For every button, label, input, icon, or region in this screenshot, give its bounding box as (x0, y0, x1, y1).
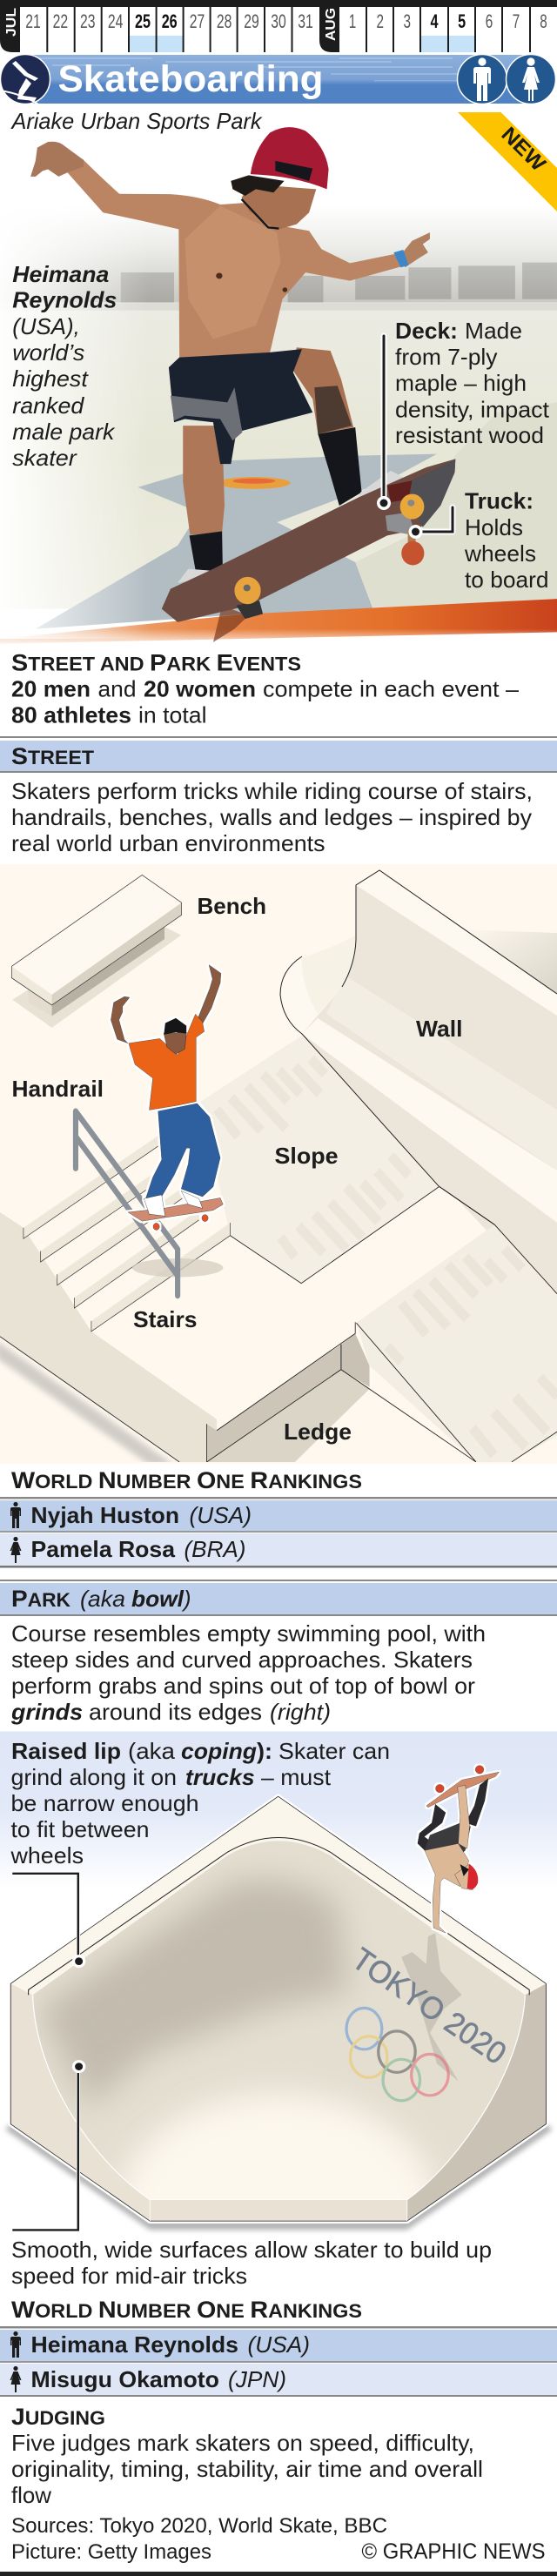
date strip: 3 (404, 10, 411, 32)
label: slope: Slope (275, 1143, 338, 1169)
text block: park description: steep sides and curved approaches. Skaters (11, 1647, 473, 1673)
wall (280, 870, 557, 1305)
date strip: 23 (80, 10, 96, 32)
venue caption: Ariake Urban Sports Park (10, 108, 263, 134)
text block: street and park events: 20 women (144, 676, 256, 702)
platform sides and ledge (0, 1186, 557, 1465)
text: raised lip: be narrow enough (10, 1790, 198, 1816)
bowl (3, 1794, 554, 2233)
text block: street and park events (11, 650, 520, 728)
text block: judging: originality, timing, stability, air time and overall (11, 2456, 483, 2482)
heading bar: park: PARK (11, 1586, 70, 1612)
text block: park description: (right) (270, 1699, 331, 1725)
bench (11, 875, 182, 1028)
text: raised lip: to fit between (10, 1816, 149, 1842)
caption: Heimana Reynolds (12, 261, 117, 471)
text: raised lip (10, 1738, 390, 1868)
date strip: 8 (540, 10, 547, 32)
text block: street and park events: in total (138, 702, 207, 728)
text block: street and park events: 80 athletes (11, 702, 131, 728)
date strip: 22 (53, 10, 68, 32)
text block: judging: JUDGING (11, 2404, 105, 2430)
callout: deck: density, impact (395, 397, 550, 423)
text block: judging: flow (11, 2482, 51, 2508)
caption: Heimana Reynolds: highest (12, 366, 90, 392)
callout: truck: wheels (464, 540, 536, 567)
text block: park description: Course resembles empty swimming pool, with (11, 1620, 486, 1647)
text: raised lip: Skater can (278, 1738, 390, 1764)
title text: Skateboarding (57, 58, 324, 100)
skater figure (30, 127, 455, 642)
text block: smooth surfaces: speed for mid-air tricks (11, 2263, 247, 2289)
sources and credit (11, 2514, 545, 2564)
ribbon: new event (458, 112, 557, 211)
date strip: 30 (271, 10, 286, 32)
text block: park description: around its edges (89, 1699, 262, 1725)
date strip: 1 (349, 10, 356, 32)
callout: truck: to board (465, 567, 548, 593)
date strip: 26 (162, 10, 178, 32)
heading bar: park: (aka (80, 1586, 125, 1612)
date strip: 21 (25, 10, 41, 32)
icon: man (10, 1502, 21, 1528)
rankings: street: Nyjah Huston (31, 1502, 179, 1528)
text: raised lip: coping (181, 1738, 257, 1764)
caption: Heimana Reynolds: world’s (12, 339, 84, 366)
leader: raised lip (12, 1874, 85, 1968)
heading bar: park: ) (181, 1586, 191, 1612)
label: bench: Bench (197, 893, 266, 919)
text block: judging: Five judges mark skaters on speed, difficulty, (11, 2430, 474, 2456)
callout: deck: resistant wood (395, 422, 544, 448)
date strip: AUG (324, 8, 339, 41)
text: raised lip: (aka (128, 1738, 176, 1764)
text: raised lip: – must (261, 1764, 332, 1790)
handrail (76, 1111, 178, 1296)
callout: truck: Holds (465, 514, 523, 540)
date strip: 4 (430, 10, 439, 32)
text block: park description (10, 1620, 486, 1725)
footer bar (0, 2572, 557, 2576)
title banner (0, 54, 555, 104)
sources and credit: Picture: Getty Images (11, 2540, 211, 2564)
icon: man (10, 2331, 21, 2358)
callout: deck: from 7-ply (395, 344, 498, 370)
label: stairs: Stairs (133, 1306, 197, 1332)
rankings: park: WORLD NUMBER ONE RANKINGS (11, 2297, 362, 2323)
text block: park description: perform grabs and spins out of top of bowl or (11, 1673, 475, 1699)
rankings: park (0, 2297, 557, 2397)
caption: Heimana Reynolds: (USA), (12, 313, 80, 339)
rankings: park: Heimana Reynolds (31, 2331, 238, 2358)
heading bar: park (0, 1580, 557, 1616)
caption: Heimana Reynolds: skater (12, 445, 77, 471)
text block: street and park events: and (97, 676, 136, 702)
text: raised lip: trucks (185, 1764, 255, 1790)
date strip: JUL (4, 8, 19, 37)
photo: skater Heimana Reynolds in a bowl (0, 127, 557, 647)
callout: deck: Deck: (395, 318, 458, 344)
text: raised lip: Raised lip (11, 1738, 121, 1764)
text block: street and park events: compete in each event – (263, 676, 520, 702)
caption: Heimana Reynolds: Heimana (12, 261, 109, 287)
date strip: 25 (135, 10, 151, 32)
text block: street description: Skaters perform tricks while riding course of stairs, (11, 778, 533, 804)
label: ledge: Ledge (284, 1419, 352, 1445)
date strip: 29 (244, 10, 259, 32)
bowl lettering: TOKYO 2020 (346, 1941, 513, 2071)
icon: skateboarding pictogram (0, 54, 50, 104)
rankings: park: Misugu Okamoto (31, 2366, 219, 2392)
heading bar: park: bowl (131, 1586, 185, 1612)
caption: Heimana Reynolds: male park (12, 419, 116, 445)
skater: park (418, 1766, 500, 1933)
date strip: 31 (298, 10, 313, 32)
caption: Heimana Reynolds: Reynolds (12, 287, 117, 313)
icon: woman (10, 2366, 21, 2392)
date strip: 6 (486, 10, 493, 32)
slope (201, 1036, 439, 1284)
text block: street description (11, 778, 533, 856)
rankings: park: (USA) (247, 2331, 310, 2358)
callout: truck (409, 487, 548, 593)
date strip: 7 (513, 10, 520, 32)
rankings: street: WORLD NUMBER ONE RANKINGS (11, 1467, 362, 1493)
label: handrail: Handrail (12, 1076, 104, 1102)
date strip: 27 (190, 10, 205, 32)
coping (29, 1837, 529, 1995)
text block: street and park events: STREET AND PARK EVENTS (11, 650, 301, 676)
text block: street and park events: 20 men (11, 676, 91, 702)
leader: smooth surfaces (12, 2060, 85, 2230)
ribbon: new event: NEW (497, 123, 550, 177)
text block: judging (11, 2404, 483, 2508)
rankings: street: (USA) (190, 1502, 252, 1528)
callout: deck (377, 318, 550, 510)
text: raised lip: grind along it on (10, 1764, 177, 1790)
caption: Heimana Reynolds: ranked (12, 392, 85, 419)
text: raised lip: ): (257, 1738, 272, 1764)
photo background (0, 206, 557, 644)
date strip (0, 0, 557, 52)
text block: street description: handrails, benches, walls and ledges – inspired by (11, 804, 532, 830)
date strip: 24 (108, 10, 123, 32)
stairs (23, 1136, 231, 1332)
panel: street course illustration (0, 864, 557, 1465)
text block: smooth surfaces: Smooth, wide surfaces allow skater to build up (11, 2237, 492, 2263)
heading bar: street (0, 736, 557, 773)
skater: street (111, 965, 223, 1230)
date strip: 28 (217, 10, 232, 32)
sources and credit: Sources: Tokyo 2020, World Skate, BBC (11, 2514, 387, 2538)
sources and credit: © GRAPHIC NEWS (362, 2539, 545, 2564)
date strip: 2 (376, 10, 384, 32)
text: raised lip: wheels (10, 1842, 84, 1868)
rankings: park: (JPN) (228, 2366, 286, 2392)
callout: deck: maple – high (395, 370, 527, 396)
callout: truck: Truck: (465, 487, 534, 513)
olympic rings (346, 2008, 448, 2101)
text block: smooth surfaces (11, 2237, 492, 2289)
label: wall: Wall (416, 1016, 463, 1042)
bowl interior (33, 1841, 525, 2200)
rankings: street (0, 1467, 557, 1568)
date strip: 5 (458, 10, 466, 32)
rankings: street: Pamela Rosa (31, 1536, 176, 1562)
text block: street description: real world urban environments (11, 830, 325, 856)
icon: men's event (458, 54, 507, 104)
red beanie (251, 127, 329, 189)
heading bar: street: STREET (11, 743, 95, 769)
text block: park description: grinds (10, 1699, 83, 1725)
callout: deck: Made (465, 318, 522, 344)
icon: woman (10, 1537, 21, 1563)
rankings: street: (BRA) (185, 1536, 245, 1562)
panel: park bowl illustration (0, 1732, 557, 2233)
icon: women's event (507, 54, 555, 104)
